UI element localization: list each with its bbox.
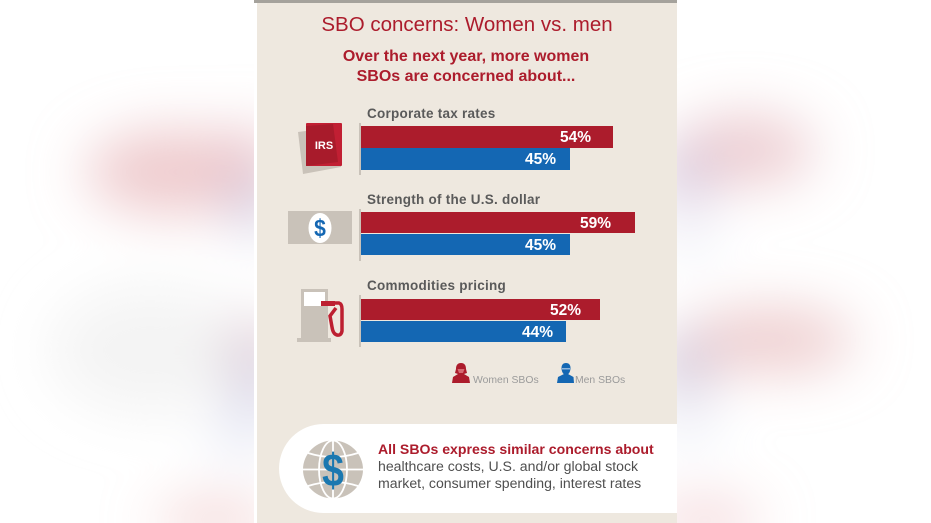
bar: women 54%: 54% — [560, 129, 591, 146]
bar: men 45%: 45% — [525, 237, 556, 254]
legend label: women: Women SBOs — [473, 375, 539, 386]
bar: women 59% — [361, 212, 635, 233]
icon: dollar bill — [288, 211, 352, 244]
bar: men 44%: 44% — [522, 324, 553, 341]
label: Strength of the U.S. dollar — [367, 192, 540, 207]
bar: men 44% — [361, 321, 566, 342]
icon: man — [557, 363, 574, 383]
legend label: men: Men SBOs — [575, 375, 625, 386]
icon: globe with dollar: $ — [322, 445, 344, 497]
row: commodities pricing — [297, 278, 600, 347]
bar: men 45% — [361, 234, 570, 255]
callout text — [378, 441, 654, 491]
icon: gas pump — [297, 289, 344, 342]
legend — [452, 363, 625, 386]
icon: woman — [452, 363, 470, 383]
main panel — [257, 0, 677, 523]
icon: dollar bill: $ — [314, 215, 326, 241]
icon: IRS document: IRS — [315, 140, 333, 152]
callout pill — [279, 424, 677, 513]
title: SBO concerns: Women vs. men — [321, 13, 613, 36]
icon: globe with dollar — [303, 440, 363, 498]
callout text: All SBOs express similar concerns about — [378, 441, 654, 457]
icon: IRS document — [298, 123, 342, 174]
subtitle: Over the next year, more women — [343, 48, 589, 65]
subtitle — [343, 48, 589, 85]
bar: men 45%: 45% — [525, 151, 556, 168]
callout text: healthcare costs, U.S. and/or global stock — [378, 458, 638, 474]
row: corporate tax rates — [298, 106, 613, 175]
subtitle: SBOs are concerned about... — [357, 68, 575, 85]
bar: women 54% — [361, 126, 613, 148]
label: Commodities pricing — [367, 278, 506, 293]
bar: women 59%: 59% — [580, 215, 611, 232]
bar: men 45% — [361, 148, 570, 170]
bar: women 52%: 52% — [550, 302, 581, 319]
bar: women 52% — [361, 299, 600, 320]
label: Corporate tax rates — [367, 106, 496, 121]
row: strength of the dollar — [288, 192, 635, 261]
callout text: market, consumer spending, interest rates — [378, 475, 641, 491]
